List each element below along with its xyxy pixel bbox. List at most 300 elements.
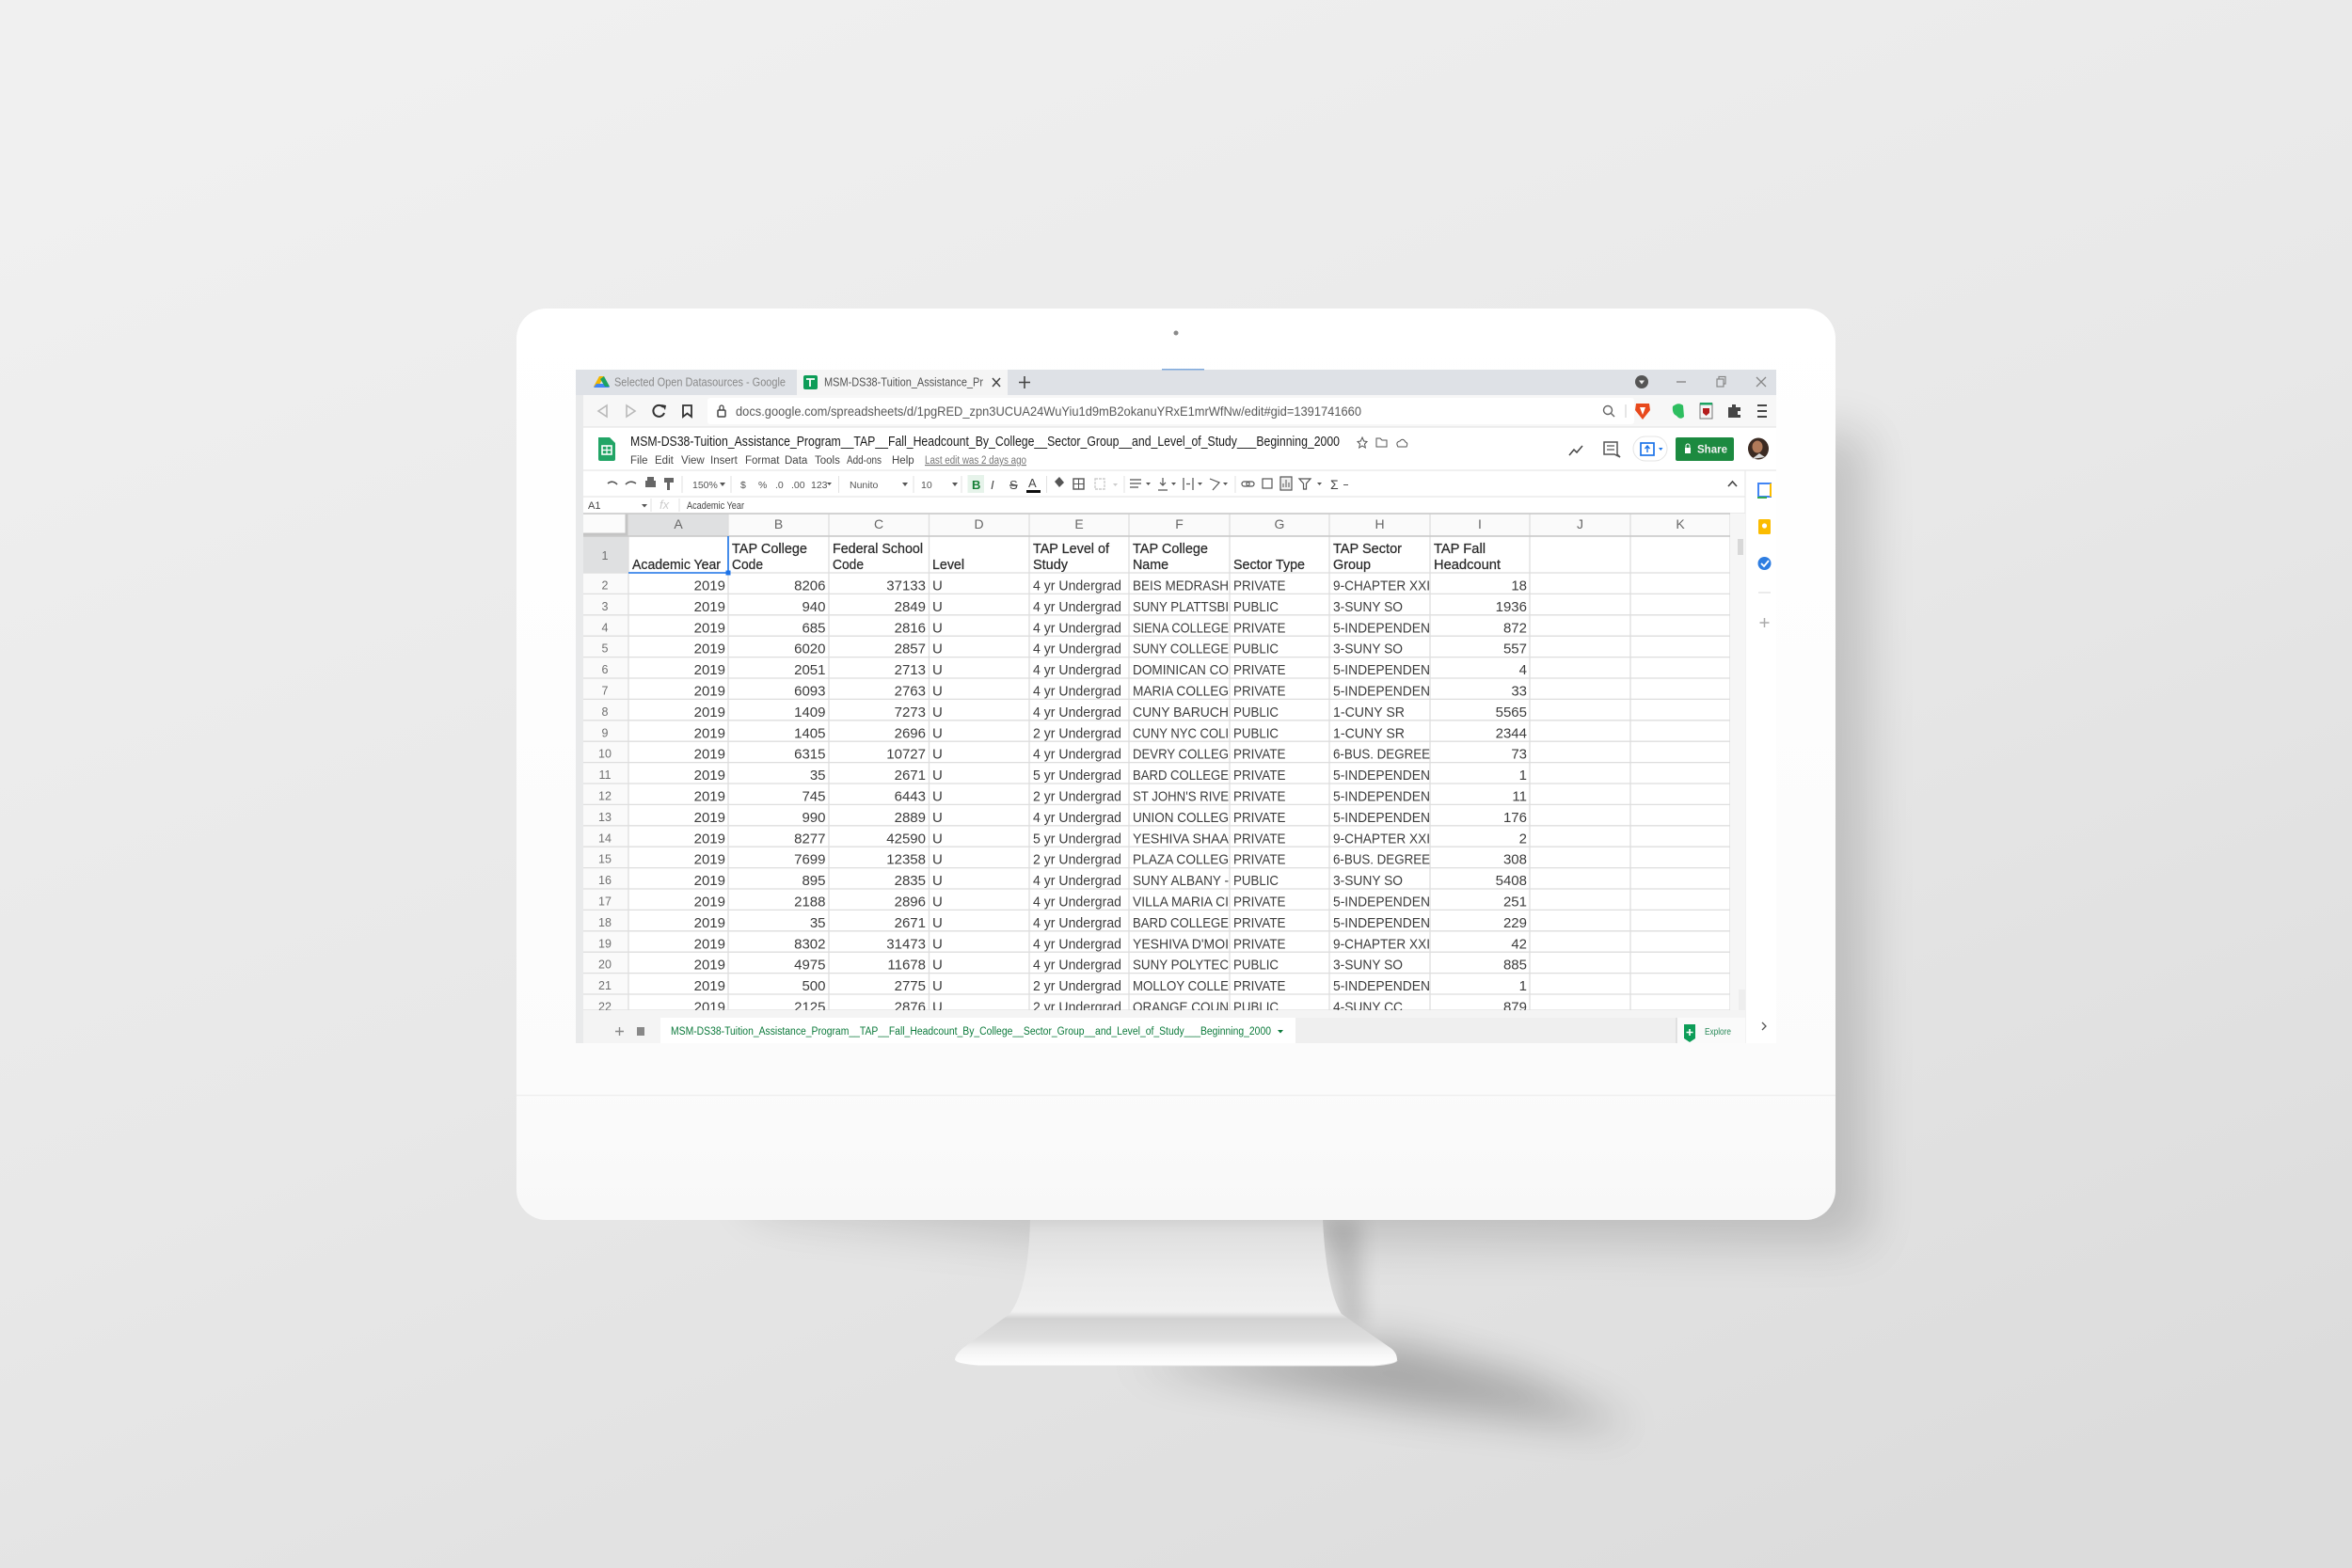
row 9: 2344 [1496,725,1527,741]
bottom sheet bar [583,1010,1745,1043]
row 8: CUNY BARUCH [1133,705,1229,721]
column letters [674,519,1684,529]
row 4: 685 [802,620,826,636]
row 22: 879 [1503,999,1527,1016]
url text: docs.google.com/spreadsheets/d/1pgRED_zpn3UCUA24WuYiu1d9mB2okanuYRxE1mrWfNw/edit#gid=1391741660 [736,404,1361,419]
row 14: YESHIVA SHAA [1133,831,1229,847]
row 7 [602,685,1526,698]
formula bar: Academic Year [687,500,744,512]
row 3: 4 yr Undergrad [1033,599,1121,615]
menu bar: Help [892,455,914,467]
row 12: 745 [802,788,826,805]
header row: TAP College [1133,541,1208,557]
row 22: 2019 [694,999,725,1016]
row 4: PRIVATE [1233,620,1285,636]
header row: Headcount [1434,557,1502,573]
navigation icons [598,404,725,417]
row 17: VILLA MARIA CI [1133,894,1229,911]
row 5: 557 [1503,641,1527,657]
row 18: 5-INDEPENDEN [1333,915,1430,931]
row 12: 6443 [895,788,926,805]
row 22: 4-SUNY CC [1333,999,1403,1016]
formula bar: fx [660,498,670,512]
row 12: PRIVATE [1233,788,1285,805]
active tab [797,370,1008,395]
row 2: 2019 [694,578,725,594]
row 19: 19 [598,937,612,950]
monitor shadow [753,433,1867,1430]
row 3 [602,601,1526,614]
row 8: 1409 [794,705,826,721]
sheets toolbar: % [758,480,767,491]
row 7: PRIVATE [1233,683,1285,700]
sheets toolbar: $ [740,480,746,491]
row 18: U [932,915,943,931]
side panel [1745,470,1771,1043]
row 5: SUNY COLLEGE [1133,641,1229,657]
icon: plus [1759,618,1769,627]
row 15: 12358 [886,852,926,868]
sheets toolbar: .00 [791,480,805,491]
row 10: 6315 [794,747,826,763]
row 19: 9-CHAPTER XXI [1333,936,1430,952]
row 15: 7699 [794,852,826,868]
header row: Level [932,557,964,573]
row 21: PRIVATE [1233,978,1285,994]
share button [1676,437,1734,461]
row 16: 16 [598,874,612,887]
row 13: 13 [598,811,612,824]
row 8: 7273 [895,705,926,721]
sheets toolbar [583,471,1745,497]
spreadsheet grid [583,514,1745,1016]
row 10: DEVRY COLLEG [1133,747,1229,763]
row 15: 2 yr Undergrad [1033,852,1121,868]
row 9: 2 yr Undergrad [1033,725,1121,741]
sheets toolbar: 150% [692,480,718,491]
row 9: U [932,725,943,741]
row 16: U [932,873,943,889]
avatar [1748,438,1769,459]
row 20: 2019 [694,958,725,974]
row 18: PRIVATE [1233,915,1285,931]
row 2: BEIS MEDRASH [1133,578,1229,594]
row 2: 8206 [794,578,826,594]
menu bar: Format [745,455,780,467]
row 19 [598,939,1526,952]
row 11 [599,769,1526,783]
row 12: ST JOHN'S RIVE [1133,788,1229,805]
row 9: CUNY NYC COLI [1133,725,1229,741]
row 5: 3-SUNY SO [1333,641,1403,657]
row 7: 4 yr Undergrad [1033,683,1121,700]
row 9: 2696 [895,725,926,741]
row 3: PUBLIC [1233,599,1279,615]
header row: 1 [602,549,609,562]
row 8: 8 [602,705,609,719]
row 2: 18 [1511,578,1527,594]
header row: TAP College [732,541,807,557]
row 22 [598,1001,1526,1010]
row 4: U [932,620,943,636]
row 17: 5-INDEPENDEN [1333,894,1430,911]
row 15 [598,854,1526,867]
row 13: 2889 [895,810,926,826]
row 6: 4 [1519,662,1527,678]
row 19: 8302 [794,936,826,952]
row 13: 990 [802,810,826,826]
column letters: I [1478,516,1482,531]
row 14: 2 [1519,831,1527,847]
menu bar: Add-ons [847,455,882,467]
row 20: 885 [1503,958,1527,974]
row 20: 20 [598,958,612,972]
row 11: U [932,768,943,784]
row 21: MOLLOY COLLE [1133,978,1229,994]
row 8: PUBLIC [1233,705,1279,721]
row 17: 17 [598,895,612,909]
header row: TAP Level of [1033,541,1110,557]
row 11: 5 yr Undergrad [1033,768,1121,784]
row 21 [598,980,1526,993]
row 22: 2876 [895,999,926,1016]
row 20: 3-SUNY SO [1333,958,1403,974]
row 17: 2188 [794,894,826,911]
sheets toolbar: S [1009,478,1018,492]
menu bar: View [681,455,705,467]
camera [1174,331,1178,335]
row 10: 2019 [694,747,725,763]
header row [602,541,1502,573]
sheets document header [583,435,1776,470]
icon: calendar [1757,483,1771,498]
row 4: 5-INDEPENDEN [1333,620,1430,636]
row 4: 4 [602,621,609,634]
row 7: 6093 [794,683,826,700]
row 18: 18 [598,916,612,929]
row 2: U [932,578,943,594]
row 4: SIENA COLLEGE [1133,620,1229,636]
row 20: U [932,958,943,974]
row 8: U [932,705,943,721]
row 6: 2713 [895,662,926,678]
sheet tab: MSM-DS38-Tuition_Assistance_Program__TAP__Fall_Headcount_By_College__Sector_Group__and_Level_of_Study___Beginning_2000 [671,1026,1271,1037]
column letters: E [1074,516,1084,531]
browser tab bar [576,369,1776,395]
all sheets [637,1027,644,1036]
row 2: 37133 [886,578,926,594]
column letters: D [974,516,984,531]
row 14: PRIVATE [1233,831,1285,847]
formula bar [588,498,744,512]
explore button: Explore [1705,1026,1731,1037]
row 20 [598,959,1526,973]
row 11: 11 [599,768,612,782]
row 7: 7 [602,685,609,698]
column letters: C [874,516,883,531]
row 3: U [932,599,943,615]
row 7: U [932,683,943,700]
row 17: 2019 [694,894,725,911]
row 10 [598,749,1526,762]
row 20: PUBLIC [1233,958,1279,974]
row 15: 2019 [694,852,725,868]
row 7: 33 [1511,683,1527,700]
row 3: 1936 [1496,599,1527,615]
column letters: F [1175,516,1184,531]
row 2: 9-CHAPTER XXI [1333,578,1430,594]
header row: Code [833,557,864,573]
row 3: SUNY PLATTSBI [1133,599,1229,615]
explore button [1684,1024,1731,1042]
title icons [1358,437,1407,448]
column letters: J [1577,516,1583,531]
column letters: G [1275,516,1284,531]
header row: Federal School [833,541,923,557]
row 21: 500 [802,978,826,994]
row 6: 2051 [794,662,826,678]
row 18: 2019 [694,915,725,931]
row 6: DOMINICAN CO [1133,662,1229,678]
menu bar: Edit [655,455,675,467]
row 22: 2 yr Undergrad [1033,999,1121,1016]
row 4 [602,623,1526,636]
row 7: 2019 [694,683,725,700]
extension icons [1603,403,1767,420]
active tab: MSM-DS38-Tuition_Assistance_Pr [824,376,983,389]
row 10: U [932,747,943,763]
row 21: 5-INDEPENDEN [1333,978,1430,994]
sheets toolbar: I [991,478,994,492]
screen [576,369,1776,1043]
row 15: U [932,852,943,868]
row 13: 2019 [694,810,725,826]
row 15: 15 [598,853,612,866]
row 4: 2019 [694,620,725,636]
row 5: U [932,641,943,657]
row 11: 2671 [895,768,926,784]
row 6: U [932,662,943,678]
row 19: 2019 [694,936,725,952]
row 16: 2019 [694,873,725,889]
row 8: 4 yr Undergrad [1033,705,1121,721]
row 19: PRIVATE [1233,936,1285,952]
vertical scrollbar [1730,514,1745,1010]
icon: tasks [1757,557,1771,570]
row 5: 2857 [895,641,926,657]
row 18: 2671 [895,915,926,931]
row 11: 35 [810,768,826,784]
row 14: U [932,831,943,847]
row 3: 3 [602,600,609,613]
row 19: U [932,936,943,952]
bold button: B [972,478,980,492]
row 16: 3-SUNY SO [1333,873,1403,889]
row 4: 872 [1503,620,1527,636]
row 14: 8277 [794,831,826,847]
row 20: 4975 [794,958,826,974]
row 5 [602,643,1526,657]
row 6: 2019 [694,662,725,678]
sheets toolbar: Σ [1330,477,1339,492]
add sheet [615,1027,624,1036]
row 6: 5-INDEPENDEN [1333,662,1430,678]
row 22: 2125 [794,999,826,1016]
row 3: 3-SUNY SO [1333,599,1403,615]
row 8 [602,706,1526,720]
row 11: PRIVATE [1233,768,1285,784]
row 14: 42590 [886,831,926,847]
row 6: PRIVATE [1233,662,1285,678]
sheets toolbar: Nunito [850,480,879,491]
row 8: 1-CUNY SR [1333,705,1405,721]
menu bar [630,455,1026,467]
row 5: 5 [602,642,609,656]
row 13: 5-INDEPENDEN [1333,810,1430,826]
row 7: MARIA COLLEG [1133,683,1229,700]
row 16: 2835 [895,873,926,889]
row 21: 2 yr Undergrad [1033,978,1121,994]
row 11: 5-INDEPENDEN [1333,768,1430,784]
row 5: 4 yr Undergrad [1033,641,1121,657]
sheets toolbar: 10 [921,480,932,491]
formula bar: A1 [588,500,600,512]
row 12: 2019 [694,788,725,805]
selected cell A1 [628,536,730,576]
row 17: 2896 [895,894,926,911]
new tab plus [1019,376,1030,388]
row 21: 21 [598,979,612,992]
monitor body [516,309,1836,1220]
column letters: A [674,516,683,531]
row 14: 5 yr Undergrad [1033,831,1121,847]
row 11: BARD COLLEGE [1133,768,1229,784]
row 13: 176 [1503,810,1527,826]
row 10: 4 yr Undergrad [1033,747,1121,763]
row 10: PRIVATE [1233,747,1285,763]
row 2 [602,579,1526,593]
column letters: B [774,516,783,531]
row 9: 1-CUNY SR [1333,725,1405,741]
row 16: SUNY ALBANY - [1133,873,1229,889]
row 22: U [932,999,943,1016]
browser url bar [583,395,1776,427]
row 9: 9 [602,726,609,739]
row 14: 14 [598,832,612,845]
row 22: 22 [598,1001,612,1014]
row 3: 2849 [895,599,926,615]
row 12: U [932,788,943,805]
row 12 [598,790,1526,803]
row 18: 4 yr Undergrad [1033,915,1121,931]
grid lines [583,514,1745,1010]
header row: TAP Fall [1434,541,1486,557]
row 8: 2019 [694,705,725,721]
row 4: 2816 [895,620,926,636]
sheets toolbar: A [1028,476,1037,490]
inactive tab: Selected Open Datasources - Google [614,376,786,389]
row 17: PRIVATE [1233,894,1285,911]
row 15: PRIVATE [1233,852,1285,868]
row 3: 2019 [694,599,725,615]
header row: Group [1333,557,1371,573]
row 10: 10727 [886,747,926,763]
row 5: PUBLIC [1233,641,1279,657]
header row: Sector Type [1233,557,1305,573]
share button: Share [1697,444,1727,455]
row 2: PRIVATE [1233,578,1285,594]
row 7: 5-INDEPENDEN [1333,683,1430,700]
row 20: 4 yr Undergrad [1033,958,1121,974]
header row: Academic Year [632,557,721,573]
header row: TAP Sector [1333,541,1402,557]
header row: Code [732,557,763,573]
menu bar: File [630,455,648,467]
header row: Study [1033,557,1068,573]
row 22: ORANGE COUN [1133,999,1229,1016]
row 16: PUBLIC [1233,873,1279,889]
icon: keep [1758,519,1771,534]
row 6 [602,664,1527,677]
row 13: PRIVATE [1233,810,1285,826]
row 22: PUBLIC [1233,999,1279,1016]
row 9: PUBLIC [1233,725,1279,741]
row 21: 2019 [694,978,725,994]
row 21: U [932,978,943,994]
sheets toolbar: .0 [775,480,784,491]
row 13: U [932,810,943,826]
row 21: 1 [1519,978,1527,994]
bold button [967,475,984,493]
column letters: H [1375,516,1385,531]
row 19: 42 [1511,936,1527,952]
row 17 [598,895,1526,909]
row 4: 4 yr Undergrad [1033,620,1121,636]
row 18: BARD COLLEGE [1133,915,1229,931]
column letters: K [1676,516,1685,531]
chevron [1762,1022,1766,1030]
row 13: 4 yr Undergrad [1033,810,1121,826]
row 15: PLAZA COLLEG [1133,852,1229,868]
menu bar: Tools [815,455,840,467]
row 6: 6 [602,663,609,676]
header actions [1569,436,1667,461]
row 9: 1405 [794,725,826,741]
row 8: 5565 [1496,705,1527,721]
row 13 [598,812,1526,825]
row 14 [598,833,1526,847]
row 5: 2019 [694,641,725,657]
row 20: 11678 [887,958,926,974]
row 18 [598,917,1526,930]
row 19: 31473 [886,936,926,952]
window controls [1635,375,1766,388]
row 17: 4 yr Undergrad [1033,894,1121,911]
row 12: 2 yr Undergrad [1033,788,1121,805]
column and row headers background [583,514,728,572]
document title: MSM-DS38-Tuition_Assistance_Program__TAP__Fall_Headcount_By_College__Sector_Group__and_Level_of_Study___Beginning_2000 [630,435,1340,450]
row 11: 1 [1519,768,1527,784]
row 18: 35 [810,915,826,931]
row 3: 940 [802,599,826,615]
row 21: 2775 [895,978,926,994]
row 17: U [932,894,943,911]
row 14: 9-CHAPTER XXI [1333,831,1430,847]
row 6: 4 yr Undergrad [1033,662,1121,678]
row 9: 2019 [694,725,725,741]
row 15: 6-BUS. DEGREE [1333,852,1430,868]
row 10: 6-BUS. DEGREE [1333,747,1430,763]
